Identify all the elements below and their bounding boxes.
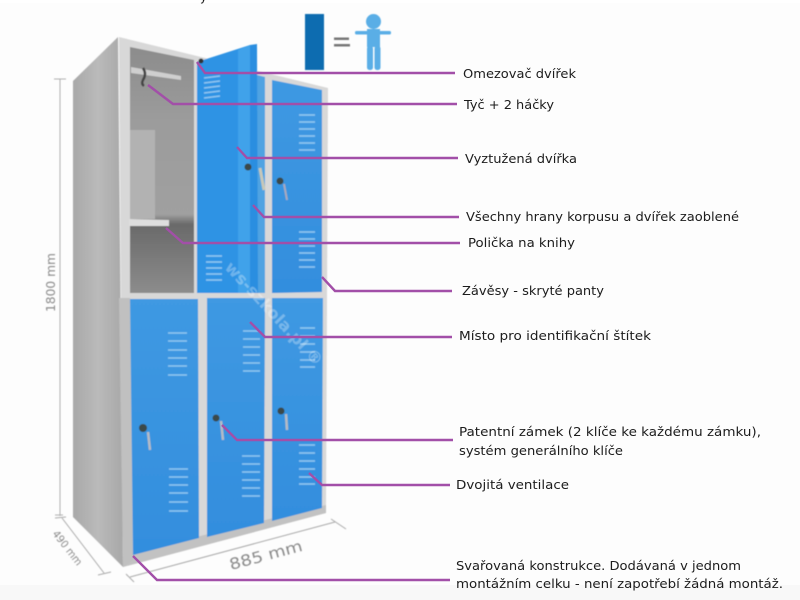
label: door stop: Omezovač dvířek — [463, 67, 576, 81]
label: rounded edges: Všechny hrany korpusu a dvířek zaoblené — [466, 210, 739, 224]
leader line: welded construction — [133, 556, 450, 580]
label: hidden hinges: Závěsy - skryté panty — [462, 284, 604, 298]
lower left door — [130, 299, 199, 555]
leader line: hidden hinges — [322, 277, 452, 291]
open door — [197, 44, 264, 293]
upper right door — [272, 80, 322, 293]
leader line: rail and hooks — [148, 85, 457, 104]
size icon: locker equals one person — [305, 14, 391, 70]
book shelf — [129, 219, 169, 226]
locker cabinet illustration — [73, 37, 328, 567]
watermark: ws-szkola.pl ® — [221, 258, 327, 369]
leader line: door stop — [197, 62, 455, 73]
lower middle door — [207, 298, 265, 537]
dimension: depth 490 mm — [50, 517, 111, 575]
leader line: double ventilation — [309, 473, 450, 485]
cabinet side panel — [73, 37, 123, 567]
leader line: label holder — [250, 322, 452, 337]
dimension: width 885 mm — [126, 519, 346, 582]
dimension: depth 490 mm: 490 mm — [50, 528, 84, 568]
leader line: reinforced door — [237, 147, 458, 158]
partly hidden door behind open door — [257, 75, 265, 293]
label: welded construction: montážním celku - není zapotřebí žádná montáž. — [456, 577, 783, 591]
cabinet front frame — [119, 37, 328, 567]
lower right door — [272, 298, 323, 521]
label: rail and hooks: Tyč + 2 háčky — [463, 98, 554, 112]
leader line: book shelf — [166, 228, 460, 243]
label: welded construction — [456, 559, 783, 591]
label: patent lock: Patentní zámek (2 klíče ke každému zámku), — [459, 425, 761, 439]
label: patent lock — [459, 425, 761, 458]
icon: equals sign — [334, 38, 350, 46]
label: welded construction: Svařovaná konstrukce. Dodávaná v jednom — [456, 559, 741, 573]
label: label holder: Místo pro identifikační štítek — [459, 329, 651, 343]
label: reinforced door: Vyztužená dvířka — [465, 152, 577, 166]
clothes rail with hooks — [131, 67, 181, 86]
dimension: height 1800 mm: 1800 mm — [44, 253, 58, 312]
label: double ventilation: Dvojitá ventilace — [456, 478, 569, 492]
leader line: rounded edges — [253, 205, 459, 217]
leader line: patent lock — [222, 425, 453, 440]
icon: locker — [305, 14, 324, 70]
open compartment interior — [130, 47, 194, 293]
label: book shelf: Polička na knihy — [468, 236, 575, 250]
dimension: width 885 mm: 885 mm — [227, 537, 304, 574]
label: patent lock: systém generálního klíče — [459, 444, 623, 458]
icon: person — [355, 14, 391, 70]
